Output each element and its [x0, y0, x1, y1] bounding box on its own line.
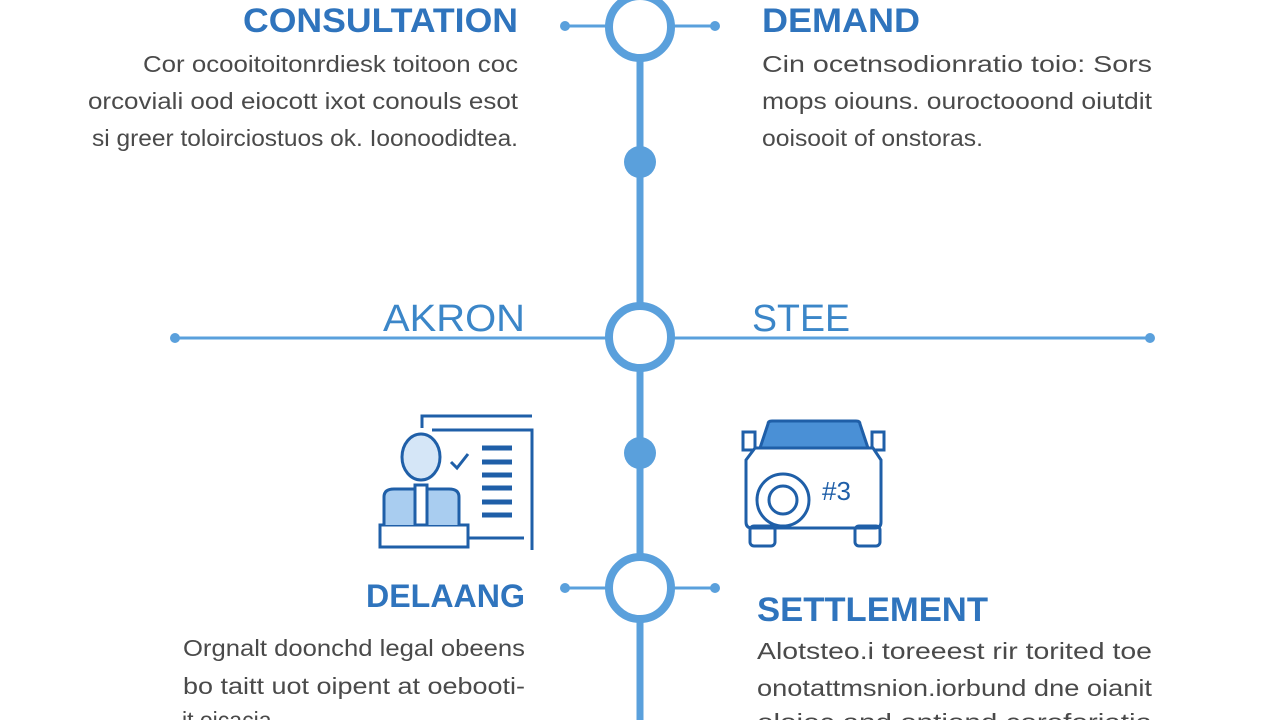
timeline spine [175, 0, 1150, 720]
step: delaang [182, 578, 525, 720]
step: demand [762, 2, 1153, 151]
icon: car: #3 [822, 476, 851, 506]
step: demand: DEMAND [762, 2, 920, 40]
step: settlement [757, 591, 1153, 720]
step: consultation [88, 2, 519, 151]
step: settlement: SETTLEMENT [757, 591, 988, 629]
step: delaang: DELAANG [366, 578, 525, 614]
step: demand: mops oiouns. ouroctooond oiutdit [762, 88, 1153, 114]
step: settlement: onotattmsnion.iorbund dne oianit [757, 675, 1153, 701]
label: stee: STEE [752, 298, 850, 340]
step: demand: ooisooit of onstoras. [762, 125, 983, 151]
step: consultation: CONSULTATION [243, 2, 518, 40]
icon: lawyer with document [380, 416, 532, 550]
step: consultation: Cor ocooitoitonrdiesk toitoon coc [143, 51, 518, 77]
icon: car [743, 421, 884, 546]
timeline nodes [170, 0, 1155, 619]
step: consultation: orcoviali ood eiocott ixot conouls esot [88, 88, 519, 114]
step: consultation: si greer toloirciostuos ok. Ioonoodidtea. [92, 125, 518, 151]
label: akron: AKRON [383, 298, 525, 340]
step: delaang: bo taitt uot oipent at oebooti- [183, 673, 525, 699]
step: delaang: Orgnalt doonchd legal obeens [183, 635, 525, 661]
step: demand: Cin ocetnsodionratio toio: Sors [762, 51, 1152, 77]
step: settlement: Alotsteo.i toreeest rir torited toe [757, 638, 1152, 664]
